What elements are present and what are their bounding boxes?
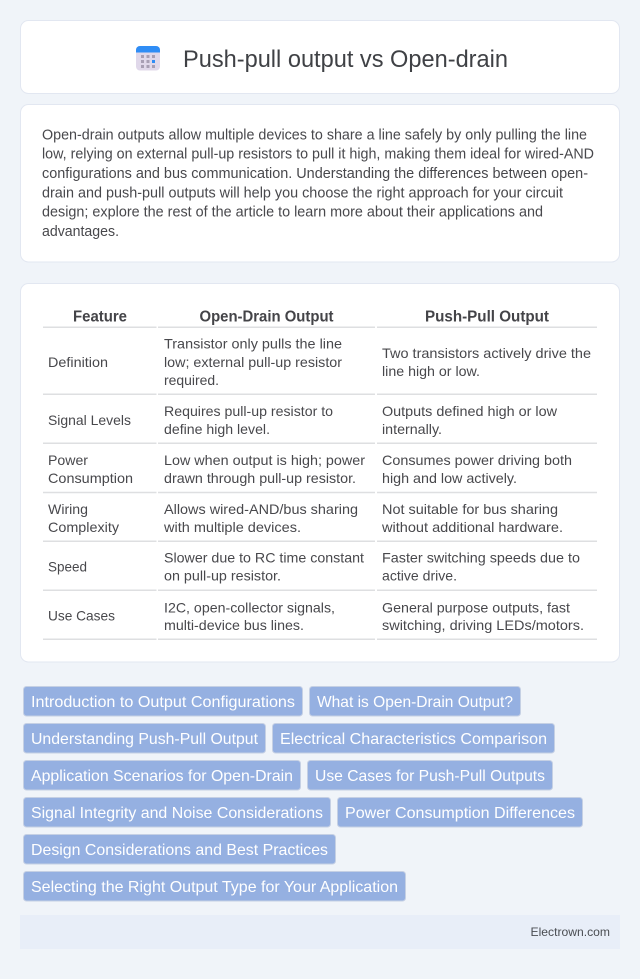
- table header row: [73, 309, 550, 326]
- tag: use cases: [308, 760, 552, 790]
- tag: signal integrity: [24, 798, 330, 827]
- title: Push-pull output vs Open-drain: [183, 46, 508, 73]
- row: signal levels: Requires pull-up resistor to: [164, 403, 333, 419]
- intro text block: [42, 127, 594, 240]
- row: wiring complexity: Wiring: [48, 501, 88, 517]
- row: definition: line high or low.: [382, 363, 480, 379]
- intro text block: configurations and bus communication. Understanding the differences between open-: [42, 166, 588, 182]
- tag: electrical characteristics: [272, 724, 554, 753]
- icon: calendar grid: [136, 46, 160, 70]
- table header row: Open-Drain Output: [200, 309, 334, 326]
- row: definition: [48, 336, 591, 388]
- footer source credit: Electrown.com: [530, 925, 610, 939]
- row: power consumption: drawn through pull-up resistor.: [164, 470, 356, 486]
- intro text block: Open-drain outputs allow multiple devices to share a line safely by only pulling the line: [42, 127, 587, 143]
- row: use cases: switching, driving LEDs/motors.: [382, 617, 584, 633]
- header panel: [20, 20, 620, 94]
- tag: design considerations: [24, 834, 336, 864]
- row: signal levels: Signal Levels: [48, 412, 131, 428]
- table rules: [43, 327, 597, 639]
- row: definition: Two transistors actively drive the: [382, 345, 591, 361]
- row: power consumption: Low when output is high; power: [164, 452, 365, 468]
- row: signal levels: internally.: [382, 421, 442, 437]
- tag: understanding push-pull: [24, 724, 266, 753]
- tag: understanding push-pull: Understanding Push-Pull Output: [31, 731, 259, 748]
- row: wiring complexity: Not suitable for bus sharing: [382, 501, 558, 517]
- tag: design considerations: Design Considerations and Best Practices: [31, 842, 328, 859]
- tag: use cases: Use Cases for Push-Pull Outputs: [315, 768, 545, 785]
- row: definition: Definition: [48, 354, 108, 370]
- row: speed: Slower due to RC time constant: [164, 550, 364, 566]
- tag: what is open-drain: What is Open-Drain Output?: [317, 694, 513, 711]
- table header row: Feature: [73, 309, 127, 326]
- tag: application scenarios: [24, 760, 300, 790]
- tag: introduction: [24, 686, 302, 716]
- topic tag list: [24, 686, 582, 901]
- row: signal levels: [48, 403, 558, 437]
- row: use cases: Use Cases: [48, 608, 115, 624]
- tag: selecting output type: [24, 872, 406, 901]
- row: use cases: multi-device bus lines.: [164, 617, 304, 633]
- row: power consumption: [48, 452, 572, 486]
- tag: electrical characteristics: Electrical Characteristics Comparison: [280, 731, 547, 748]
- footer bar: [20, 915, 620, 949]
- row: wiring complexity: Complexity: [48, 519, 119, 535]
- row: speed: Faster switching speeds due to: [382, 550, 580, 566]
- row: definition: Transistor only pulls the line: [164, 336, 342, 352]
- row: wiring complexity: with multiple devices.: [163, 519, 301, 535]
- row: use cases: General purpose outputs, fast: [382, 599, 570, 615]
- tag: introduction: Introduction to Output Configurations: [31, 694, 295, 711]
- intro text block: drain and push-pull outputs will help you choose the right approach for your circuit: [42, 185, 563, 201]
- row: definition: required.: [164, 372, 219, 388]
- table header row: Push-Pull Output: [425, 309, 550, 326]
- row: power consumption: Consumption: [48, 470, 133, 486]
- row: use cases: I2C, open-collector signals,: [164, 599, 335, 615]
- tag: power consumption: [338, 798, 582, 827]
- panel: intro paragraph: [20, 104, 620, 262]
- row: speed: [48, 550, 580, 584]
- tag: what is open-drain: [310, 686, 520, 716]
- tag: application scenarios: Application Scenarios for Open-Drain: [31, 768, 293, 785]
- row: definition: low; external pull-up resistor: [164, 354, 342, 370]
- row: wiring complexity: Allows wired-AND/bus sharing: [164, 501, 358, 517]
- tag: signal integrity: Signal Integrity and Noise Considerations: [31, 805, 323, 822]
- row: use cases: [48, 599, 584, 633]
- panel: comparison table: [20, 284, 620, 662]
- row: wiring complexity: without additional hardware.: [381, 519, 563, 535]
- row: speed: on pull-up resistor.: [164, 568, 281, 584]
- row: speed: Speed: [48, 559, 87, 575]
- row: power consumption: Power: [48, 452, 88, 468]
- row: power consumption: Consumes power driving both: [382, 452, 572, 468]
- tag: power consumption: Power Consumption Differences: [345, 805, 575, 822]
- row: signal levels: define high level.: [164, 421, 270, 437]
- tag: selecting output type: Selecting the Right Output Type for Your Application: [31, 879, 398, 896]
- row: signal levels: Outputs defined high or low: [382, 403, 558, 419]
- intro text block: advantages.: [42, 224, 119, 240]
- row: power consumption: high and low actively.: [382, 470, 517, 486]
- intro text block: design; explore the rest of the article to learn more about their applications and: [42, 205, 543, 221]
- intro text block: low, relying on external pull-up resistors to pull it high, making them ideal for wired-AND: [42, 147, 594, 163]
- row: wiring complexity: [48, 501, 563, 535]
- row: speed: active drive.: [382, 568, 457, 584]
